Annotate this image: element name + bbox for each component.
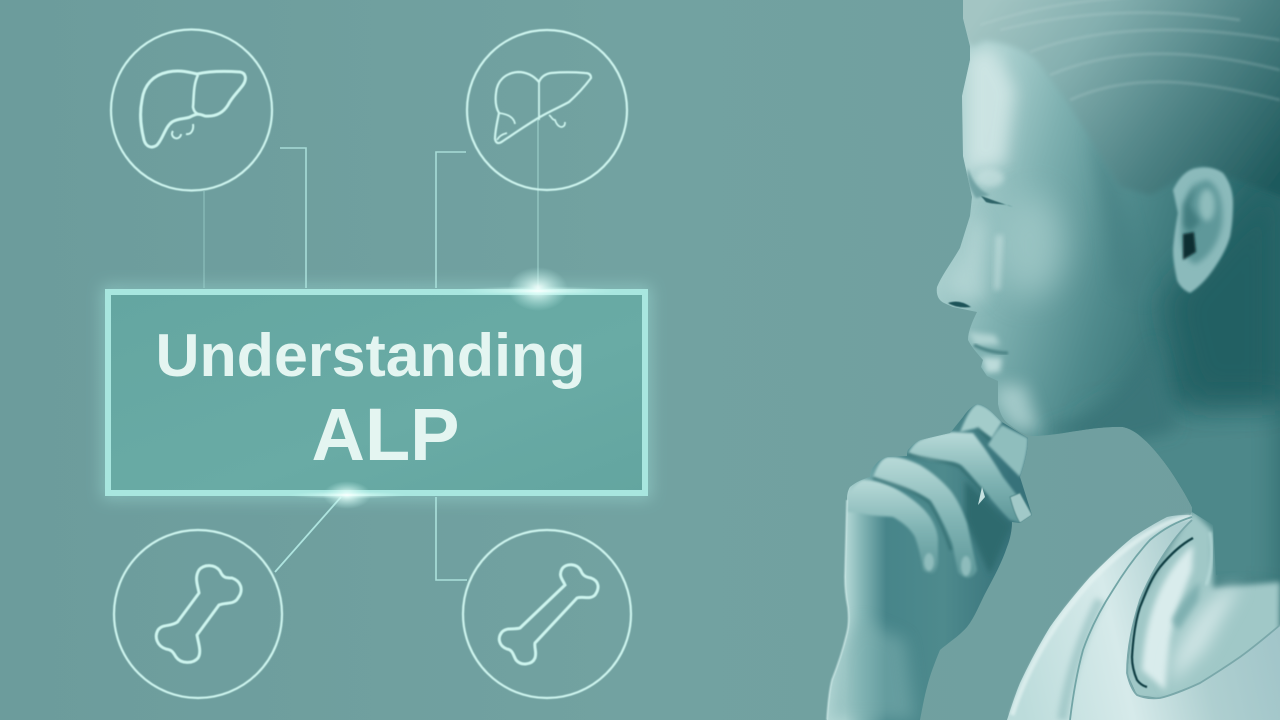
box fill [108, 292, 645, 493]
shadow under index finger [965, 480, 1012, 575]
lips and chin highlight [968, 332, 1000, 345]
glow flares on box [287, 267, 618, 509]
fingernail [1010, 493, 1032, 523]
title text: ALP: ALP [312, 393, 460, 476]
strap seam [1070, 517, 1192, 720]
illustration: woman in profile [825, 0, 1280, 720]
chest highlights [1142, 545, 1193, 690]
icon: liver in circle, top right [467, 30, 627, 190]
little finger [847, 480, 938, 573]
box border [108, 292, 645, 493]
title text: Understanding: Understanding [156, 322, 586, 389]
box glow [108, 292, 645, 493]
panel: title box [108, 292, 645, 493]
neck tendon highlight [1206, 532, 1212, 585]
head, hair and neck [936, 0, 1280, 626]
chest skin [1125, 510, 1280, 700]
hair strands [1036, 0, 1280, 102]
hand rim light [827, 500, 849, 720]
icon: bone in circle, bottom left [114, 530, 282, 698]
mouth line [974, 345, 1008, 353]
collarbone hollow [1172, 582, 1200, 630]
hand [825, 400, 1040, 720]
neck shading [1142, 400, 1280, 588]
palm and wrist [825, 400, 1040, 720]
temple shading [1094, 154, 1120, 232]
jaw shading [1054, 381, 1168, 439]
hair [955, 0, 1280, 200]
thumb knuckle [960, 404, 1002, 438]
brow bone highlight [976, 169, 1004, 187]
neckline seam [1127, 520, 1280, 698]
ear [1173, 167, 1233, 293]
forehead highlight [966, 45, 1015, 170]
finger gaps [873, 428, 990, 550]
nostril [948, 302, 971, 307]
cheek streak [994, 235, 1003, 290]
icon: liver in circle, top left [111, 30, 272, 190]
connector lines [204, 120, 538, 580]
strap shadow [1062, 600, 1100, 720]
dark neckline inner [1132, 538, 1193, 687]
index finger [908, 432, 1032, 523]
wrist shading [830, 620, 915, 720]
shoulder edge highlight [1012, 517, 1190, 715]
sliver highlight [978, 487, 985, 505]
middle finger [873, 457, 977, 578]
icon: bone in circle, bottom right [463, 530, 631, 698]
top and shoulder [1007, 515, 1280, 720]
thumb [988, 425, 1028, 477]
nose highlight [945, 215, 985, 300]
cheek highlight [996, 193, 1064, 297]
brow and eye [967, 168, 990, 198]
fingertips [924, 553, 934, 571]
